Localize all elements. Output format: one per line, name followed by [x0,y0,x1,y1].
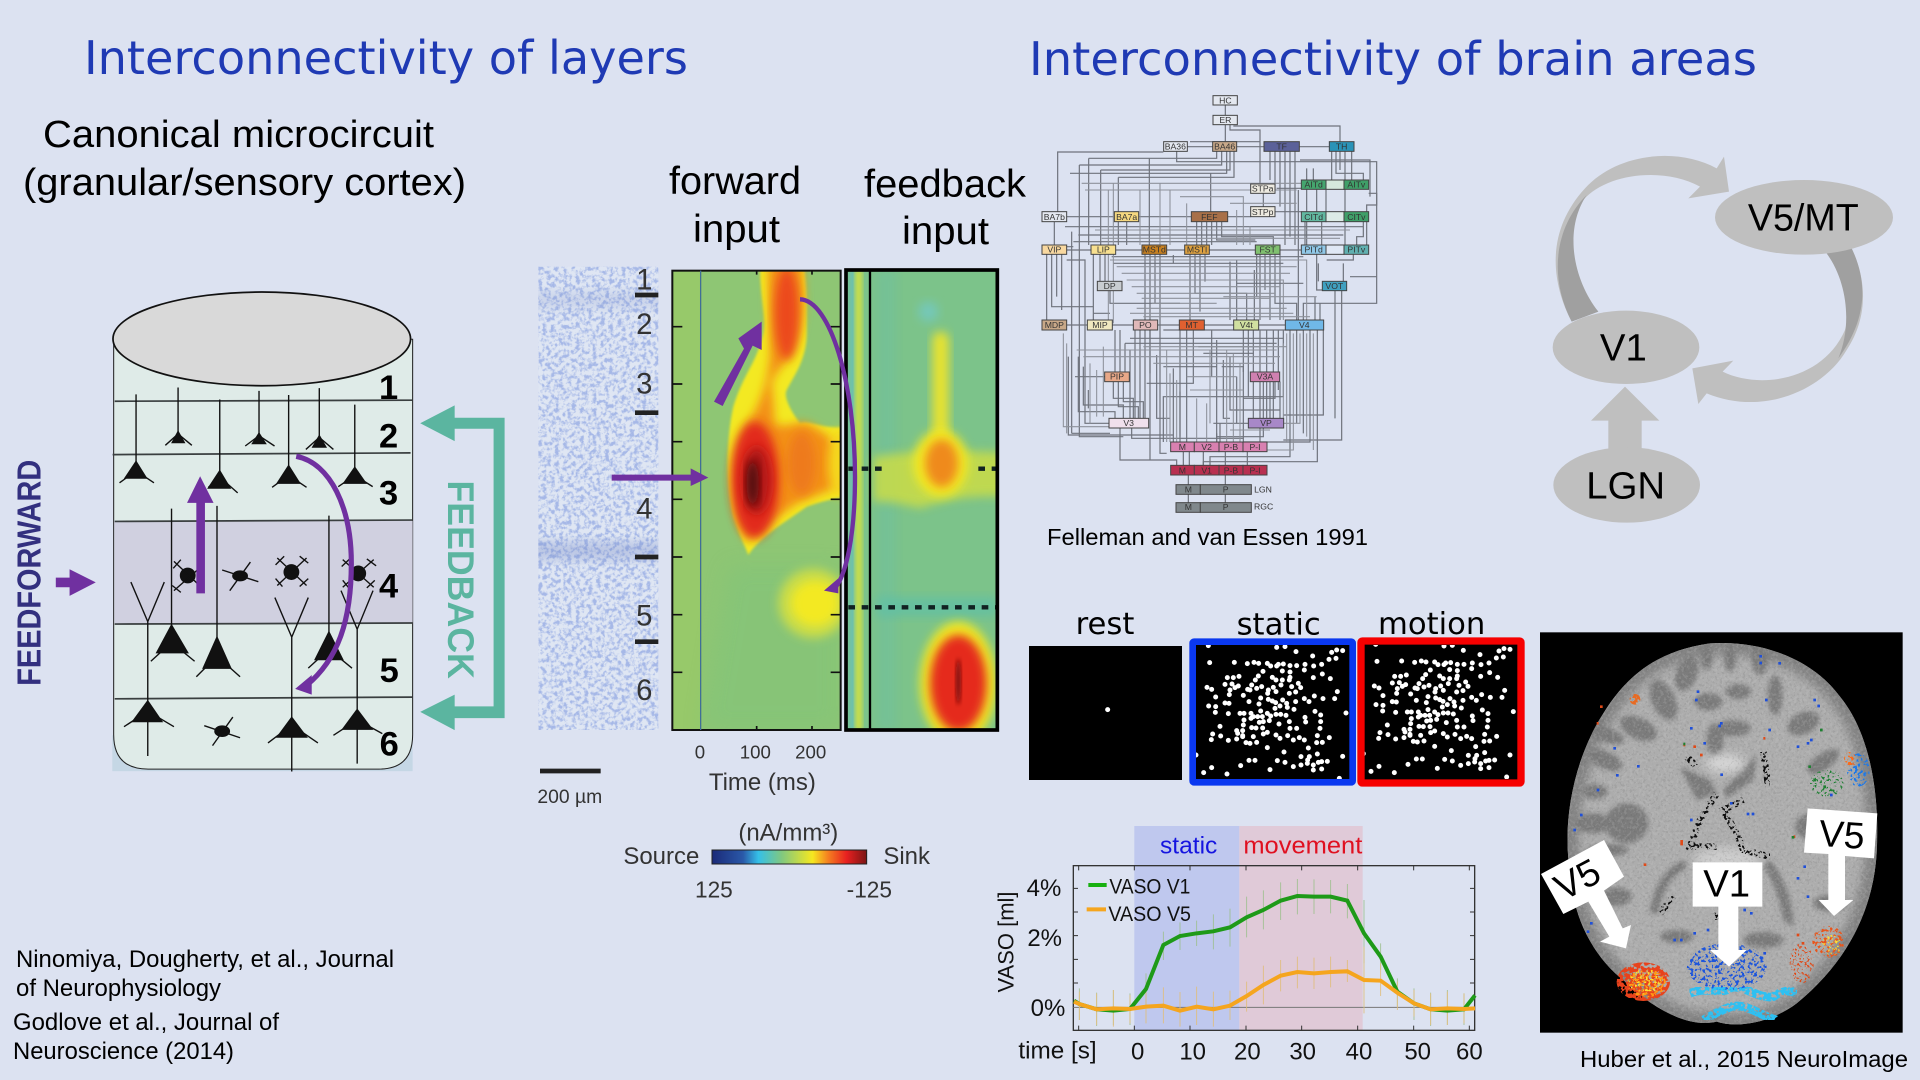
arrow: input into layer 4 [612,468,708,486]
cylinder body with layers [112,292,413,771]
panel: laminar CSD maps [523,263,1010,745]
stimulus: static: static [1237,607,1321,642]
heading: forward input: forward [669,160,801,203]
node: V1 [1553,311,1699,384]
arrow: curved purple descending [295,456,351,695]
layer markers and numbers: 6 [636,674,652,707]
node: V1: V1 [1600,327,1647,370]
axis labels: 40 [1346,1038,1372,1065]
activation clusters [1617,962,1670,1001]
axis labels: 0 [1131,1038,1144,1065]
panel: cortical column microcircuit [11,292,505,771]
Nissl stain column [538,266,658,730]
callout: V5 right: V5 [1818,812,1866,857]
area labels: M [1179,465,1186,475]
area labels: LIP [1097,245,1110,255]
area labels: MSTd [1143,245,1166,255]
area labels: P [1223,502,1229,512]
colour bar legend: Sink [883,843,931,870]
layer numbers: 1 [379,369,398,407]
area labels: BA46 [1214,142,1235,152]
heading: canonical microcircuit: Canonical microcircuit [43,114,434,156]
heading: forward input [669,160,801,251]
area labels: RGC [1254,502,1273,512]
neurons [120,387,382,771]
callout: V5 right [1804,808,1877,916]
area labels: V2 [1201,442,1212,452]
time axis labels: 0 [695,741,705,762]
area labels: BA7b [1044,212,1065,222]
area labels: MIP [1092,320,1108,330]
area labels: V1 [1201,465,1212,475]
stimulus: motion: motion [1378,607,1485,642]
area labels: FST [1259,245,1277,255]
area labels: PIP [1110,372,1124,382]
diagram: Felleman and van Essen hierarchy [1042,95,1377,512]
axis, scale bar and colour legend [537,741,931,903]
callout: V1: V1 [1703,863,1750,906]
title: Interconnectivity of layers: Interconnectivity of layers [84,31,688,85]
title: Interconnectivity of brain areas: Interconnectivity of brain areas [1029,32,1757,86]
axis labels: 50 [1404,1038,1431,1065]
area boxes [1042,96,1369,512]
layer markers and numbers: 3 [636,367,652,400]
reference citations [13,946,394,1065]
label: FEEDFORWARD: FEEDFORWARD [11,460,48,686]
area labels: ER [1219,115,1231,125]
axis labels: 0% [1031,995,1065,1022]
arrow: LGN to V1 [1591,387,1659,453]
colour bar legend: Source [623,843,699,870]
layer numbers: 2 [379,418,398,456]
area labels: CITv [1347,212,1366,222]
area labels: PITd [1305,245,1323,255]
area labels: P [1223,485,1229,495]
area labels: MT [1185,320,1199,330]
colour bar legend: -125 [847,877,892,903]
area labels: HC [1219,95,1232,105]
area labels: FEF [1201,212,1218,222]
area labels: PITv [1347,245,1366,255]
axis labels: 20 [1234,1038,1261,1065]
layer numbers: 3 [379,475,398,513]
area labels: P-I [1249,465,1261,475]
callout: V5 left: V5 [1547,850,1607,908]
layer markers and numbers [635,263,658,707]
heading: forward input: input [693,208,780,251]
node: LGN [1553,447,1700,523]
node: V5/MT [1715,180,1893,255]
black specks [1660,752,1770,920]
arrow: upward purple in column [187,476,214,593]
panel: brain activation map [1540,632,1903,1033]
caption: Felleman and van Essen 1991: Felleman and van Essen 1991 [1047,524,1368,550]
heatmap: feedback input [846,270,1010,745]
condition bands: static [1160,832,1217,859]
heading: feedback input: feedback [864,163,1026,206]
layer numbers: 4 [379,568,398,606]
series: VASO V1 [1074,896,1475,1011]
colour bar legend: (nA/mm³) [738,820,838,847]
chart: VASO time course [993,826,1483,1065]
layer numbers: 6 [380,725,399,763]
panel: stimulus conditions [1029,607,1521,783]
legend: VASO V5 [1108,902,1191,926]
scattered voxels [1573,655,1833,953]
scale bar [537,771,602,808]
brain slice [1568,643,1878,1024]
series: VASO V5 [1074,971,1475,1011]
axis labels: 2% [1027,925,1062,952]
reference citations: Godlove et al., Journal of [13,1009,279,1036]
legend [1087,874,1191,926]
area labels: V3A [1257,372,1273,382]
condition bands: movement [1243,832,1363,859]
arrow: feedforward input [56,569,96,596]
layer numbers: 5 [380,652,399,690]
callout: V1 [1693,862,1762,967]
arrow: V1 to V5/MT [1556,156,1729,322]
area labels: BA36 [1165,142,1186,152]
arrow: curved feedback on heatmap [800,299,855,593]
stimulus: static [1193,607,1353,782]
error bars [1079,879,1464,1027]
stimulus: motion [1361,607,1521,783]
area labels: VP [1260,418,1272,428]
axis labels: 4% [1027,875,1061,902]
stimulus: rest: rest [1076,607,1134,642]
scale bar: 200 µm [537,787,602,808]
area labels: VIP [1047,245,1062,255]
area labels: M [1179,442,1186,452]
area labels: TF [1276,142,1287,152]
heading: canonical microcircuit: (granular/sensory cortex) [23,162,466,204]
axes and ticks [1073,866,1475,1030]
reference citations: Neuroscience (2014) [13,1038,234,1065]
legend: VASO V1 [1109,874,1190,898]
layer markers and numbers: 4 [636,492,652,525]
axis labels: 60 [1456,1038,1483,1065]
axis labels: time [s] [1018,1037,1097,1064]
axis labels: 10 [1179,1038,1206,1065]
connection lines [1042,105,1377,503]
arrow: V5/MT to V1 [1692,248,1863,404]
condition bands [1134,826,1363,1030]
area labels: BA7a [1116,212,1137,222]
node: LGN: LGN [1586,464,1665,507]
area labels: PO [1139,320,1152,330]
area labels: P-B [1224,442,1238,452]
heading: feedback input [864,163,1026,253]
area labels: MDP [1045,320,1064,330]
caption: Huber et al.: Huber et al., 2015 NeuroImage [1580,1046,1908,1072]
axis labels: VASO [ml] [993,892,1018,992]
colour bar legend: 125 [695,877,733,903]
heading: canonical microcircuit [23,114,466,204]
area labels: TH [1336,142,1347,152]
area labels [1044,95,1366,512]
background [1540,632,1903,1033]
time axis labels: 200 [795,741,826,762]
area labels: VOT [1325,281,1344,291]
layer numbers [379,369,399,763]
area labels: V4 [1299,320,1310,330]
time axis labels [695,741,826,796]
reference citations: Ninomiya, Dougherty, et al., Journal [16,946,394,973]
stimulus: rest [1029,607,1182,780]
area labels: V4t [1240,320,1253,330]
time axis labels: Time (ms) [709,769,816,796]
arrow: feedback bracket [420,405,505,730]
label: FEEDBACK: FEEDBACK [440,480,482,679]
heading: feedback input: input [902,210,989,253]
layer markers and numbers: 2 [636,308,652,341]
area labels: AITd [1305,180,1323,190]
area labels: MSTl [1187,245,1207,255]
area labels: STPp [1252,207,1274,217]
axis labels: 30 [1289,1038,1316,1065]
arrow: diagonal upward [714,322,762,406]
node: V5/MT: V5/MT [1748,197,1859,239]
area labels: DP [1104,281,1116,291]
heatmap: forward input [672,263,848,730]
layer markers and numbers: 1 [636,263,652,296]
area labels: P-I [1249,442,1261,452]
area labels: AITv [1347,180,1366,190]
reference citations: of Neurophysiology [16,975,221,1002]
area labels: M [1185,502,1192,512]
area labels: P-B [1224,465,1238,475]
callout: V5 left [1541,840,1631,948]
colour bar legend [623,820,931,903]
area labels: STPa [1252,184,1274,194]
area labels: M [1185,485,1192,495]
area labels: LGN [1254,484,1272,494]
area labels: CITd [1304,212,1323,222]
axis labels [993,875,1483,1065]
diagram: V1, V5/MT, LGN flow [1553,156,1893,523]
area labels: V3 [1123,418,1134,428]
time axis labels: 100 [740,741,771,762]
layer markers and numbers: 5 [636,600,652,633]
